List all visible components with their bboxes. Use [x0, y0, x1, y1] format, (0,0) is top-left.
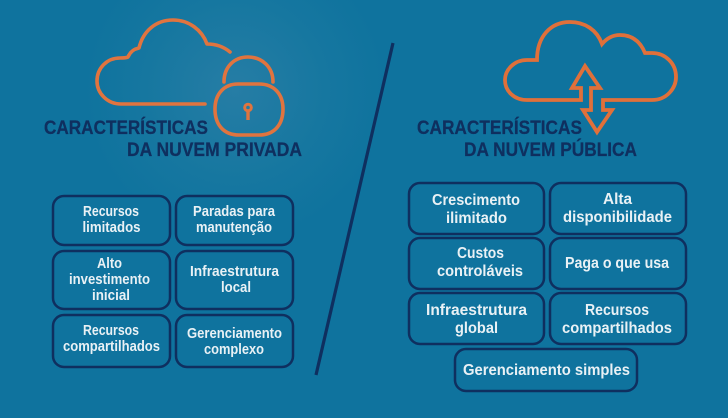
box: recursos compartilhados: Recursos — [83, 323, 139, 339]
box: recursos compartilhados — [53, 315, 170, 367]
box: infraestrutura global: Infraestrutura — [426, 302, 527, 319]
box: crescimento ilimitado: Crescimento — [432, 192, 520, 209]
box: custos controláveis — [409, 238, 544, 289]
box: recursos compartilhados: compartilhados — [562, 320, 672, 337]
box: alto investimento inicial: Alto — [97, 256, 122, 272]
box: recursos limitados: limitados — [82, 220, 140, 236]
box: recursos compartilhados: Recursos — [585, 302, 649, 319]
heading: public cloud: DA NUVEM PÚBLICA — [464, 139, 637, 161]
box: paga o que usa — [550, 238, 686, 289]
icon: public cloud with up and down arrows — [505, 22, 676, 132]
box: recursos compartilhados — [550, 293, 686, 344]
box: alta disponibilidade: disponibilidade — [563, 209, 672, 226]
box: custos controláveis: controláveis — [437, 263, 523, 280]
box: gerenciamento simples: Gerenciamento simples — [463, 362, 630, 379]
box: infraestrutura local: Infraestrutura — [190, 264, 280, 280]
box: custos controláveis: Custos — [457, 245, 504, 262]
box: gerenciamento simples — [455, 349, 637, 391]
box: infraestrutura local — [176, 251, 293, 309]
box: paradas para manutenção: manutenção — [196, 220, 272, 236]
divider line — [316, 43, 393, 375]
box: gerenciamento complexo: complexo — [204, 342, 264, 358]
box: alta disponibilidade: Alta — [603, 191, 632, 208]
heading: private cloud: CARACTERÍSTICAS — [44, 117, 208, 139]
panel: private cloud characteristics — [53, 196, 293, 367]
box: alta disponibilidade — [550, 183, 686, 234]
box: alto investimento inicial: inicial — [92, 288, 130, 304]
box: infraestrutura global: global — [455, 320, 498, 337]
panel: public cloud characteristics — [409, 183, 686, 391]
icon: private cloud with padlock — [97, 20, 283, 135]
heading: public cloud: CARACTERÍSTICAS — [417, 117, 582, 139]
box: crescimento ilimitado — [409, 183, 544, 234]
box: recursos limitados — [53, 196, 170, 245]
box: gerenciamento complexo: Gerenciamento — [187, 326, 282, 342]
heading: private cloud: DA NUVEM PRIVADA — [127, 140, 302, 161]
box: paradas para manutenção: Paradas para — [193, 204, 276, 220]
box: infraestrutura global — [409, 293, 544, 344]
box: alto investimento inicial — [53, 251, 170, 309]
box: alto investimento inicial: investimento — [69, 272, 150, 288]
box: gerenciamento complexo — [176, 315, 293, 367]
heading: public cloud — [417, 117, 637, 161]
box: recursos compartilhados: compartilhados — [63, 339, 160, 355]
box: infraestrutura local: local — [221, 280, 251, 296]
box: paradas para manutenção — [176, 196, 293, 245]
box: crescimento ilimitado: ilimitado — [446, 210, 507, 227]
box: recursos limitados: Recursos — [83, 204, 139, 220]
box: paga o que usa: Paga o que usa — [565, 255, 669, 272]
heading: private cloud — [44, 117, 302, 161]
